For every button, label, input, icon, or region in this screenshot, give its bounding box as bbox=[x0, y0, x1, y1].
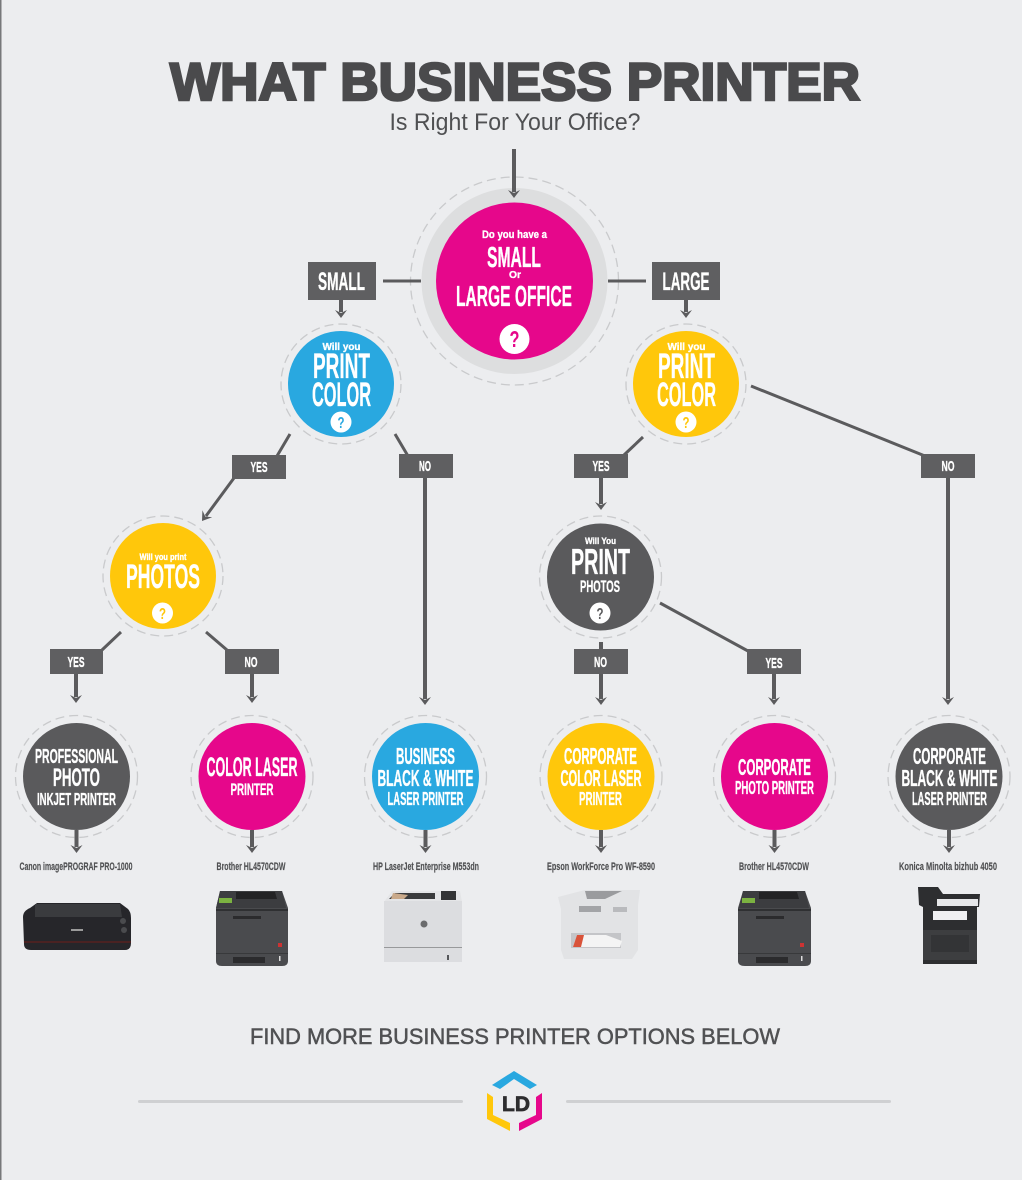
decision: large office print color bbox=[626, 324, 746, 444]
model names: Canon imagePROGRAF PRO-1000 bbox=[20, 861, 132, 873]
result: corporate photo printer: PHOTO PRINTER bbox=[735, 778, 814, 798]
result: professional photo inkjet printer: PHOTO bbox=[53, 764, 100, 792]
decision: will you print photos (yellow) bbox=[103, 516, 223, 636]
yes/no labels: YES bbox=[766, 655, 782, 672]
yes/no labels: YES bbox=[250, 459, 268, 476]
printer: Epson WorkForce bbox=[558, 890, 640, 959]
decision: small or large office bbox=[410, 177, 618, 385]
label: large bbox=[652, 262, 720, 300]
decision: small office print color: ? bbox=[338, 415, 344, 432]
decision: large office print color: COLOR bbox=[657, 376, 716, 414]
flow connectors bbox=[70, 149, 955, 853]
result: professional photo inkjet printer: PROFESSIONAL bbox=[35, 746, 118, 768]
result: business black and white laser printer: LASER PRINTER bbox=[388, 789, 464, 809]
footer heading: FIND MORE BUSINESS PRINTER OPTIONS BELOW bbox=[250, 1024, 780, 1049]
decision: small or large office: LARGE OFFICE bbox=[456, 281, 572, 313]
decision: will you print photos (yellow): PHOTOS bbox=[126, 558, 200, 596]
model names: Brother HL4570CDW bbox=[739, 861, 809, 873]
decision: will you print photos (grey): PHOTOS bbox=[580, 577, 620, 596]
decision: will you print photos (grey) bbox=[540, 516, 662, 638]
label: small bbox=[308, 262, 376, 300]
footer rule left bbox=[138, 1100, 463, 1103]
printer: Canon imagePROGRAF bbox=[23, 903, 131, 950]
result: color laser printer bbox=[191, 716, 313, 838]
decision: small office print color: Will you bbox=[322, 341, 360, 353]
result: color laser printer: COLOR LASER bbox=[206, 752, 298, 782]
result: business black and white laser printer: BLACK & WHITE bbox=[378, 765, 474, 791]
printer: Brother (color laser) bbox=[216, 891, 288, 966]
result: color laser printer: PRINTER bbox=[230, 780, 274, 799]
result: business black and white laser printer bbox=[364, 716, 486, 838]
decision: will you print photos (yellow): ? bbox=[159, 606, 166, 623]
decision: small or large office: Do you have a bbox=[482, 229, 548, 241]
yes/no labels: NO bbox=[419, 458, 431, 475]
model names: Brother HL4570CDW bbox=[216, 861, 286, 873]
arrowheads bbox=[70, 190, 955, 853]
decision: small or large office: ? bbox=[510, 326, 520, 352]
result: corporate color laser printer: PRINTER bbox=[579, 789, 622, 809]
decision: large office print color: PRINT bbox=[658, 347, 715, 386]
result: corporate photo printer bbox=[714, 716, 836, 838]
model names: HP LaserJet Enterprise M553dn bbox=[373, 861, 479, 873]
decision: will you print photos (grey): PRINT bbox=[571, 541, 630, 582]
result: corporate color laser printer: CORPORATE bbox=[564, 743, 637, 769]
label: small: SMALL bbox=[318, 268, 365, 296]
result: professional photo inkjet printer bbox=[16, 716, 138, 838]
footer rule right bbox=[566, 1100, 891, 1103]
yes/no labels: NO bbox=[594, 654, 607, 671]
result: professional photo inkjet printer: INKJET PRINTER bbox=[37, 789, 116, 809]
result: corporate color laser printer: COLOR LASER bbox=[560, 765, 642, 791]
model names bbox=[20, 861, 997, 873]
result: corporate color laser printer bbox=[540, 716, 662, 838]
decision: will you print photos (grey): Will You bbox=[585, 536, 616, 547]
yes/no labels: YES bbox=[68, 654, 84, 671]
decision: small office print color: COLOR bbox=[312, 376, 371, 414]
decision: small office print color: PRINT bbox=[313, 347, 370, 386]
decision: will you print photos (grey): ? bbox=[596, 606, 604, 623]
title: WHAT BUSINESS PRINTER bbox=[170, 53, 860, 112]
yes/no labels: NO bbox=[244, 654, 258, 671]
LD logo bbox=[487, 1071, 542, 1131]
printer: Konica Minolta bbox=[918, 887, 980, 964]
decision: large office print color: ? bbox=[682, 415, 690, 432]
result: corporate photo printer: CORPORATE bbox=[738, 754, 811, 780]
printer: HP LaserJet bbox=[384, 891, 462, 962]
yes/no labels: YES bbox=[592, 458, 610, 475]
LD logo: LD bbox=[502, 1093, 530, 1116]
decision: small or large office: Or bbox=[509, 270, 521, 281]
decision: small or large office: SMALL bbox=[487, 242, 541, 274]
decision: small office print color bbox=[281, 324, 401, 444]
printer: Brother (corporate photo) bbox=[738, 891, 811, 966]
label: large: LARGE bbox=[662, 268, 710, 296]
yes/no labels bbox=[50, 454, 975, 674]
decision: large office print color: Will you bbox=[668, 341, 706, 353]
yes/no labels: NO bbox=[942, 458, 955, 475]
result: corporate black and white laser printer bbox=[888, 716, 1010, 838]
decision: will you print photos (yellow): Will you print bbox=[140, 552, 186, 562]
model names: Epson WorkForce Pro WF-8590 bbox=[547, 861, 655, 873]
subtitle: Is Right For Your Office? bbox=[390, 109, 640, 136]
result: business black and white laser printer: BUSINESS bbox=[396, 743, 455, 769]
